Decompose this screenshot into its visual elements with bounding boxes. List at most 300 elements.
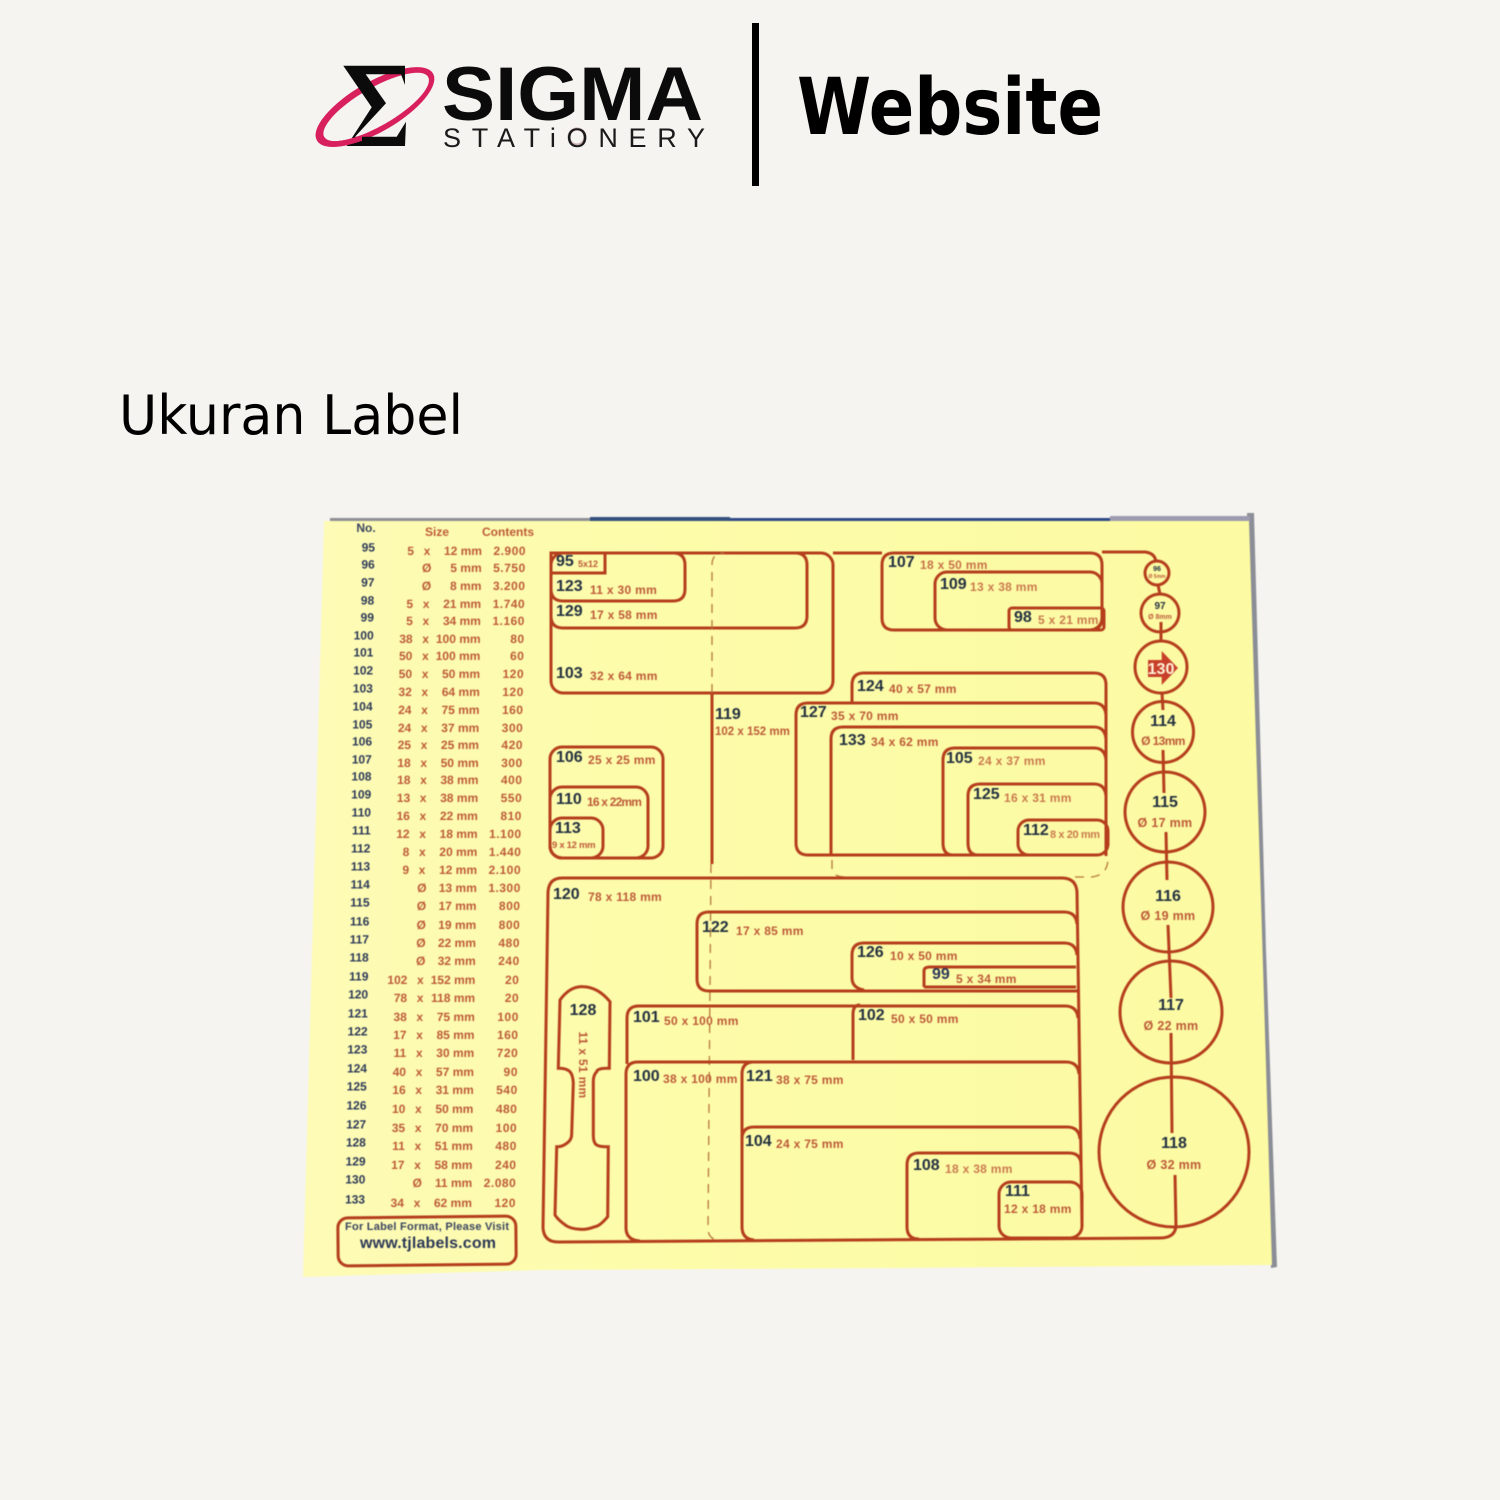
row 122: 17 <box>393 1028 407 1042</box>
row 106: x <box>421 738 428 752</box>
row 102 <box>353 664 524 681</box>
row 101: 100 mm <box>436 649 480 663</box>
row 120: 118 mm <box>431 991 475 1005</box>
label 128 jewellery tag outline <box>555 987 610 1229</box>
row 105: x <box>421 721 428 735</box>
row 110 <box>351 806 522 823</box>
label 125 outline: 16 x 31 mm <box>1004 791 1072 805</box>
label 102 outline: 50 x 50 mm <box>891 1012 959 1026</box>
label 129 outline: 129 <box>556 603 583 620</box>
row 123 <box>347 1043 518 1060</box>
row 99: x <box>422 614 430 628</box>
label 117 circle: 117 <box>1158 997 1184 1014</box>
yellow sheet <box>303 521 1272 1277</box>
row 133: 133 <box>345 1193 365 1206</box>
row 111 <box>352 824 522 841</box>
wordmark: SIGMA: SIGMA <box>442 52 703 137</box>
label 120 outline <box>543 878 1176 1242</box>
label 122 outline: 122 <box>702 919 729 936</box>
row 120: 20 <box>505 991 519 1005</box>
row 120: 120 <box>348 988 369 1001</box>
label 95 outline: 95 <box>556 553 574 570</box>
row 129: 17 <box>391 1158 405 1172</box>
row 96: Ø <box>422 561 432 575</box>
row 111: 111 <box>352 824 371 837</box>
row 123: 720 <box>497 1046 518 1060</box>
row 102: 50 mm <box>442 667 480 681</box>
row 119: x <box>417 973 424 987</box>
row 110: 16 <box>396 809 410 823</box>
label 104 outline <box>742 1127 1080 1151</box>
row 104: 75 mm <box>441 703 480 717</box>
row 124: x <box>416 1065 423 1079</box>
label 133 outline: 133 <box>839 732 866 749</box>
row 128: x <box>414 1139 422 1153</box>
row 114: 13 mm <box>439 881 477 895</box>
row 121: 75 mm <box>437 1010 475 1024</box>
label 108 outline: 108 <box>913 1157 940 1174</box>
row 118: 240 <box>498 954 520 968</box>
label 104 outline: 24 x 75 mm <box>776 1137 844 1151</box>
row 101: x <box>422 649 429 663</box>
label 115 circle <box>1125 772 1205 852</box>
row 96: 5.750 <box>493 561 526 575</box>
row 110: 110 <box>352 806 371 819</box>
label 106 outline: 25 x 25 mm <box>588 753 656 767</box>
row 127: 100 <box>495 1121 517 1135</box>
row 109 <box>351 788 522 805</box>
label 118 circle: Ø 32 mm <box>1147 1158 1201 1172</box>
row 99: 5 <box>406 614 413 628</box>
row 109: 38 mm <box>440 791 478 805</box>
label 114 circle <box>1132 702 1194 762</box>
label 113 outline: 9 x 12 mm <box>552 840 595 851</box>
row 113: 2.100 <box>488 863 521 877</box>
label 97 circle: 97 <box>1154 601 1166 612</box>
row 108: 400 <box>501 773 523 787</box>
header divider <box>752 23 759 186</box>
row 98: x <box>423 597 430 611</box>
label 113 outline <box>550 818 603 858</box>
row 107: x <box>420 756 428 770</box>
row 104: 104 <box>352 700 373 713</box>
label 120 outline: 78 x 118 mm <box>588 890 662 904</box>
row 114 <box>350 878 521 895</box>
label 101 outline <box>627 1006 1078 1064</box>
row 103: 103 <box>353 682 373 695</box>
row 107: 50 mm <box>441 756 479 770</box>
row 100: x <box>422 632 429 646</box>
row 128: 51 mm <box>435 1139 473 1153</box>
row 102: 102 <box>353 664 374 677</box>
row 108: x <box>420 773 427 787</box>
label 130 circle with arrow: 130 <box>1148 661 1174 678</box>
label 126 outline <box>852 943 1077 990</box>
label 104 outline: 104 <box>745 1133 772 1150</box>
row 114: Ø <box>417 881 427 895</box>
row 103 <box>353 682 524 699</box>
row 112: 112 <box>351 842 371 855</box>
label 127 outline: 35 x 70 mm <box>831 709 899 723</box>
label 111 outline <box>999 1182 1082 1238</box>
label 118 circle <box>1099 1077 1249 1227</box>
row 117 <box>350 933 520 950</box>
row 127: 127 <box>346 1118 367 1131</box>
row 96: 96 <box>361 558 375 571</box>
row 133: 34 <box>391 1196 404 1210</box>
row 110: 22 mm <box>440 809 478 823</box>
row 107: 18 <box>397 756 411 770</box>
row 106 <box>352 735 523 752</box>
row 109: 13 <box>397 791 411 805</box>
row 100: 100 mm <box>436 632 481 646</box>
label 119 outline: 119 <box>715 706 741 723</box>
row 118: Ø <box>416 954 425 968</box>
row 96 <box>361 558 526 575</box>
row 99 <box>360 611 525 628</box>
row 113 <box>351 860 521 877</box>
label 115 circle: 115 <box>1152 794 1178 811</box>
row 128: 128 <box>346 1136 366 1149</box>
label 112 outline: 8 x 20 mm <box>1050 829 1100 841</box>
row 113: 12 mm <box>439 863 477 877</box>
row 116: 19 mm <box>438 918 476 932</box>
row 126: 480 <box>496 1102 518 1116</box>
row 129: x <box>414 1158 421 1172</box>
label 110 outline: 16 x 22mm <box>587 795 641 809</box>
row 99: 1.160 <box>492 614 525 628</box>
label 123 outline: 123 <box>556 578 583 595</box>
row 130: 2.080 <box>484 1176 516 1190</box>
icon: sigma symbol with ring <box>316 66 434 147</box>
row 118: 118 <box>349 951 369 964</box>
label 110 outline: 110 <box>556 791 582 808</box>
row 115 <box>350 896 521 913</box>
row 121: x <box>416 1010 424 1024</box>
row 122: 160 <box>497 1028 519 1042</box>
row 117: 22 mm <box>438 936 476 950</box>
row 95: 95 <box>362 541 375 554</box>
label 123 outline: 11 x 30 mm <box>590 583 657 597</box>
row 104: x <box>421 703 428 717</box>
row 125: x <box>415 1083 422 1097</box>
row 100 <box>354 629 525 646</box>
row 109: 109 <box>351 788 372 801</box>
wordmark ring on O <box>569 129 585 145</box>
row 126: 50 mm <box>435 1102 474 1116</box>
row 123: 11 <box>393 1046 407 1060</box>
row 101 <box>353 646 525 663</box>
row 130: 130 <box>345 1173 366 1186</box>
row 127 <box>346 1118 517 1135</box>
row 130 <box>345 1173 516 1190</box>
callout: label format website: For Label Format, Please Visit <box>345 1221 509 1233</box>
label 105 outline: 105 <box>946 750 973 767</box>
label 100 outline: 100 <box>633 1068 660 1085</box>
row 106: 106 <box>352 735 372 748</box>
label 101 outline: 50 x 100 mm <box>664 1014 739 1028</box>
row 101: 60 <box>510 649 524 663</box>
label 107 outline: 18 x 50 mm <box>920 558 988 572</box>
label 117 circle: Ø 22 mm <box>1144 1019 1198 1033</box>
label 96 circle: 96 <box>1153 566 1161 573</box>
label 115 circle: Ø 17 mm <box>1138 816 1192 830</box>
label 120 outline: 120 <box>553 886 580 903</box>
label 99 outline <box>924 966 1076 987</box>
row 126: 10 <box>392 1102 406 1116</box>
label 108 outline: 18 x 38 mm <box>945 1162 1013 1176</box>
label 102 outline <box>853 1005 959 1060</box>
label 98 outline: 98 <box>1014 609 1032 626</box>
label 100 outline <box>626 1062 1079 1241</box>
row 119: 20 <box>505 973 520 987</box>
row 98: 5 <box>406 597 414 611</box>
row 125 <box>347 1080 518 1097</box>
row 111: 1.100 <box>489 827 522 841</box>
row 126: x <box>415 1102 422 1116</box>
label 117 circle <box>1120 961 1222 1063</box>
label 124 outline <box>852 673 1106 856</box>
label 107 outline <box>882 553 1102 630</box>
row 116: Ø <box>416 918 426 932</box>
row 133: x <box>414 1196 421 1210</box>
row 128: 11 <box>392 1139 405 1153</box>
row 102: 50 <box>399 667 413 681</box>
row 97 <box>361 576 526 593</box>
logo: Sigma Stationery <box>316 66 704 148</box>
row 119: 152 mm <box>431 973 476 987</box>
row 95: 5 <box>407 544 414 558</box>
row 97: 3.200 <box>493 579 526 593</box>
row 120: x <box>417 991 424 1005</box>
callout: label format website: www.tjlabels.com <box>359 1235 496 1252</box>
row 103: 64 mm <box>442 685 480 699</box>
row 121: 121 <box>348 1007 368 1020</box>
row 107: 107 <box>352 753 372 766</box>
label 126 outline: 126 <box>857 944 884 961</box>
heading: Ukuran Label: Ukuran Label <box>119 384 463 447</box>
row 130: 11 mm <box>435 1176 472 1190</box>
label 110 outline <box>550 787 648 858</box>
row 124: 40 <box>393 1065 406 1079</box>
label 97 circle <box>1141 594 1179 632</box>
row 115: Ø <box>417 899 426 913</box>
plastic sleeve edge <box>1247 513 1277 1268</box>
row 107 <box>352 753 523 770</box>
row 98 <box>361 594 525 611</box>
row 122 <box>347 1025 519 1042</box>
row 115: 800 <box>499 899 521 913</box>
label 123 outline <box>551 553 685 601</box>
label 116 circle: 116 <box>1155 888 1181 905</box>
row 98: 98 <box>361 594 375 607</box>
callout: label format website <box>338 1216 516 1266</box>
row 119 <box>349 970 520 987</box>
heading: Website: Website <box>797 63 1103 153</box>
row 110: x <box>419 809 427 823</box>
label 112 outline <box>1018 820 1108 855</box>
label 97 circle: Ø 8mm <box>1148 614 1172 621</box>
label 125 outline <box>968 784 1106 855</box>
row 112: 20 mm <box>439 845 477 859</box>
row 125: 540 <box>496 1083 518 1097</box>
row 119: 102 <box>387 973 408 987</box>
row 99: 34 mm <box>443 614 481 628</box>
row 95: 2.900 <box>493 544 526 558</box>
row 110: 810 <box>500 809 522 823</box>
label 109 outline: 109 <box>940 576 967 593</box>
row 126 <box>346 1099 518 1116</box>
label 121 outline: 38 x 75 mm <box>776 1073 844 1087</box>
row 98: 21 mm <box>443 597 481 611</box>
label 95 outline: 5x12 <box>578 559 598 569</box>
row 124: 90 <box>504 1065 518 1079</box>
label 105 outline: 24 x 37 mm <box>978 754 1046 768</box>
row 121 <box>348 1007 519 1024</box>
row 108 <box>351 770 523 787</box>
row 95: x <box>424 544 431 558</box>
label 98 outline <box>1009 608 1104 630</box>
row 108: 108 <box>351 770 372 783</box>
row 101: 50 <box>399 649 413 663</box>
table headers: Contents <box>482 525 534 539</box>
row 118 <box>349 951 520 968</box>
row 111: x <box>419 827 426 841</box>
row 112: 8 <box>403 845 410 859</box>
row 102: x <box>422 667 429 681</box>
label 129 outline <box>551 553 807 628</box>
row 115: 17 mm <box>438 899 477 913</box>
row 130: Ø <box>413 1176 422 1190</box>
label 116 circle <box>1123 862 1213 952</box>
table headers <box>356 521 534 539</box>
label 118 circle: 118 <box>1161 1135 1187 1152</box>
label 95 outline <box>551 553 605 573</box>
row 128 <box>346 1136 517 1153</box>
label 119 outline: 102 x 152 mm <box>715 726 790 738</box>
row 125: 125 <box>347 1080 367 1093</box>
row 97: Ø <box>422 579 431 593</box>
row 127: 35 <box>392 1121 406 1135</box>
row 100: 80 <box>510 632 525 646</box>
label 127 outline: 127 <box>800 704 827 721</box>
row 112 <box>351 842 522 859</box>
row 120: 78 <box>394 991 408 1005</box>
row 124 <box>347 1062 518 1079</box>
row 124: 124 <box>347 1062 367 1075</box>
label 109 outline: 13 x 38 mm <box>970 580 1038 594</box>
row 127: 70 mm <box>435 1121 473 1135</box>
label 106 outline: 106 <box>556 749 583 766</box>
label 126 outline: 10 x 50 mm <box>890 949 958 963</box>
table rows <box>345 541 526 1210</box>
label 113 outline: 113 <box>555 820 581 837</box>
label 103 outline <box>551 553 833 693</box>
row 104: 160 <box>502 703 524 717</box>
row 123: x <box>416 1046 423 1060</box>
row 105: 24 <box>398 721 412 735</box>
row 133: 120 <box>494 1196 516 1210</box>
row 120 <box>348 988 519 1005</box>
label 122 outline <box>697 912 1077 991</box>
row 109: x <box>420 791 427 805</box>
row 96: 5 mm <box>450 561 482 575</box>
row 113: 9 <box>402 863 410 877</box>
label 119 outline <box>708 553 790 1240</box>
label 130 circle with arrow <box>1135 641 1187 693</box>
label 124 outline: 40 x 57 mm <box>889 682 957 696</box>
label 128 jewellery tag outline: 11 x 51 mm <box>576 1031 590 1099</box>
label 124 outline: 124 <box>857 678 884 695</box>
row 133: 62 mm <box>434 1196 472 1210</box>
row 97: 97 <box>361 576 375 589</box>
row 106: 25 <box>398 738 411 752</box>
row 98: 1.740 <box>493 597 525 611</box>
row 121: 38 <box>393 1010 407 1024</box>
row 114: 114 <box>350 878 370 891</box>
row 116 <box>350 915 520 932</box>
row 129 <box>345 1155 517 1172</box>
row 117: 480 <box>498 936 520 950</box>
label 102 outline: 102 <box>858 1007 885 1024</box>
panel: label sheet <box>303 513 1277 1277</box>
label 128 jewellery tag outline: 128 <box>570 1002 596 1019</box>
label 114 circle: Ø 13mm <box>1141 734 1185 748</box>
label 122 outline: 17 x 85 mm <box>736 924 804 938</box>
row 118: 32 mm <box>438 954 476 968</box>
row 115: 115 <box>350 896 370 909</box>
row 95: 12 mm <box>444 544 482 558</box>
row 123: 30 mm <box>436 1046 474 1060</box>
row 116: 800 <box>499 918 520 932</box>
row 129: 58 mm <box>434 1158 473 1172</box>
row 114: 1.300 <box>488 881 521 895</box>
label 111 outline: 12 x 18 mm <box>1004 1202 1072 1216</box>
label 114 circle: 114 <box>1150 713 1176 730</box>
row 106: 25 mm <box>441 738 479 752</box>
label 98 outline: 5 x 21 mm <box>1038 613 1099 627</box>
row 116: 116 <box>350 915 370 928</box>
label 103 outline: 103 <box>556 665 583 682</box>
row 95 <box>362 541 526 558</box>
row 105 <box>352 718 523 735</box>
row 103: 120 <box>502 685 524 699</box>
row 117: 117 <box>350 933 369 946</box>
row 99: 99 <box>361 611 374 624</box>
row 121: 100 <box>497 1010 519 1024</box>
row 104: 24 <box>398 703 412 717</box>
row 100: 38 <box>399 632 413 646</box>
row 122: 122 <box>347 1025 368 1038</box>
label 96 circle <box>1145 561 1169 585</box>
row 108: 38 mm <box>440 773 479 787</box>
label 99 outline: 99 <box>932 966 950 983</box>
label 99 outline: 5 x 34 mm <box>956 972 1017 986</box>
row 124: 57 mm <box>436 1065 474 1079</box>
label 133 outline <box>831 727 1108 877</box>
label 133 outline: 34 x 62 mm <box>871 735 939 749</box>
row 103: 32 <box>398 685 412 699</box>
circle chain connecting lines <box>1158 585 1176 1227</box>
row 129: 129 <box>345 1155 366 1168</box>
row 111: 18 mm <box>440 827 478 841</box>
label 109 outline <box>935 572 1102 630</box>
wordmark: STATIONERY: STATiONERY <box>443 123 705 153</box>
row 109: 550 <box>501 791 522 805</box>
label 96 circle: Ø 5mm <box>1149 574 1166 580</box>
row 129: 240 <box>495 1158 517 1172</box>
label 129 outline: 17 x 58 mm <box>590 608 658 622</box>
